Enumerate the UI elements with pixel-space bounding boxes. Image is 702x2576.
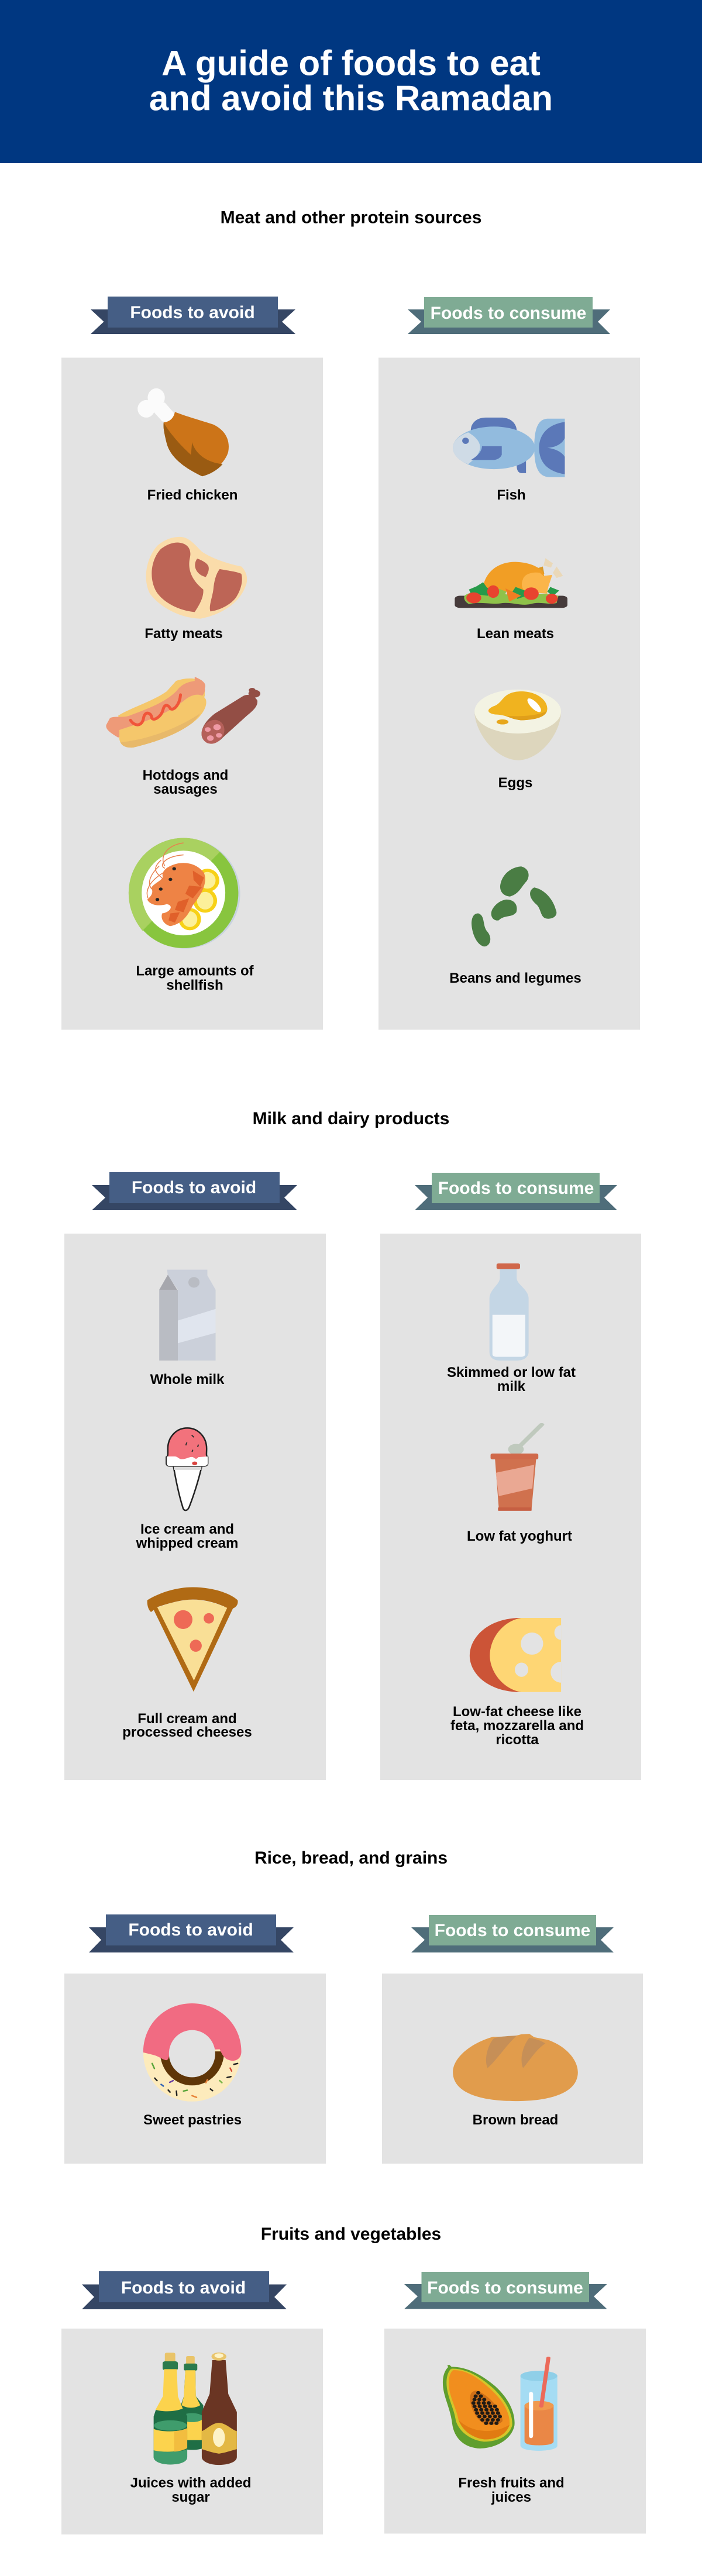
icon: plate of shellfish — [129, 838, 240, 949]
icon: fatty meat — [146, 537, 247, 619]
icon: milk bottle — [490, 1263, 529, 1361]
heading: rice, bread, and grains: Rice, bread, and grains — [254, 1848, 448, 1868]
label: fresh fruits and juices: Fresh fruits and — [458, 2475, 565, 2491]
ribbon: foods to avoid: Foods to avoid — [130, 303, 255, 322]
ribbon: foods to avoid: Foods to avoid — [121, 2278, 246, 2298]
section: rice, bread, and grains — [64, 1848, 643, 2164]
icon: fish — [453, 418, 565, 477]
label: large amounts of shellfish: Large amounts of — [136, 963, 254, 979]
label: whole milk: Whole milk — [150, 1372, 225, 1387]
label: fried chicken: Fried chicken — [147, 487, 238, 503]
label: hotdogs and sausages: Hotdogs and — [143, 767, 228, 783]
icon: hotdog and sausage — [106, 677, 260, 748]
section: meat and other protein sources — [61, 208, 640, 1029]
ribbon: foods to avoid: Foods to avoid — [128, 1920, 253, 1940]
label line: shellfish: shellfish — [166, 977, 223, 993]
section: milk and dairy products — [64, 1109, 641, 1780]
icon: yoghurt cup with spoon — [491, 1424, 542, 1511]
label line: sausages: sausages — [153, 781, 218, 797]
section: fruits and vegetables — [61, 2224, 646, 2534]
icon: sugary juice bottles — [154, 2353, 237, 2465]
label: full cream and processed cheeses: Full cream and — [137, 1711, 237, 1727]
panel: dairy foods to avoid — [64, 1234, 326, 1780]
header banner with title: and avoid this Ramadan — [149, 78, 553, 118]
label: sweet pastries: Sweet pastries — [143, 2112, 242, 2128]
icon: beans and legumes — [472, 866, 556, 946]
panel: grain foods to avoid — [64, 1974, 326, 2164]
panel: dairy foods to consume — [380, 1234, 641, 1780]
label line: whipped cream: whipped cream — [136, 1535, 238, 1551]
label line: ricotta: ricotta — [495, 1732, 539, 1748]
panel: protein foods to consume — [378, 358, 640, 1029]
ribbon: foods to avoid — [92, 1172, 297, 1210]
panel: protein foods to avoid — [61, 358, 323, 1029]
heading: milk and dairy products: Milk and dairy products — [253, 1109, 449, 1128]
ribbon: foods to avoid — [82, 2271, 287, 2309]
icon: ice cream cone — [166, 1428, 208, 1510]
ribbon: foods to consume: Foods to consume — [438, 1179, 594, 1198]
header banner with title: A guide of foods to eat — [161, 43, 541, 83]
ribbon: foods to avoid — [89, 1914, 294, 1952]
label: eggs: Eggs — [498, 775, 532, 791]
ribbon: foods to consume — [415, 1173, 617, 1210]
icon: brown bread — [453, 2034, 578, 2101]
label line: sugar: sugar — [171, 2489, 210, 2505]
label line: milk: milk — [497, 1379, 526, 1394]
ribbon: foods to consume — [411, 1915, 614, 1952]
label line: processed cheeses: processed cheeses — [122, 1724, 252, 1740]
label: low fat yoghurt: Low fat yoghurt — [467, 1528, 572, 1544]
label: fatty meats: Fatty meats — [144, 626, 223, 642]
icon: cheese wheel — [470, 1618, 561, 1692]
label: lean meats: Lean meats — [477, 626, 554, 642]
ribbon: foods to consume: Foods to consume — [435, 1921, 590, 1940]
icon: milk carton — [159, 1270, 216, 1361]
label: brown bread: Brown bread — [473, 2112, 558, 2128]
ribbon: foods to avoid — [91, 297, 295, 334]
ribbon: foods to consume: Foods to consume — [431, 304, 586, 323]
label: juices with added sugar: Juices with added — [130, 2475, 251, 2491]
icon: egg — [474, 690, 561, 760]
icon: papaya and fruit juice — [443, 2358, 558, 2451]
heading: meat and other protein sources: Meat and other protein sources — [221, 208, 481, 227]
label: skimmed or low fat milk: Skimmed or low fat — [447, 1365, 576, 1380]
label: ice cream and whipped cream: Ice cream and — [140, 1521, 234, 1537]
label: low-fat cheese like feta, mozzarella and ricotta: Low-fat cheese like — [453, 1704, 581, 1720]
ribbon: foods to consume: Foods to consume — [427, 2278, 583, 2298]
panel: fruit and vegetable foods to consume — [384, 2329, 646, 2534]
label: beans and legumes: Beans and legumes — [449, 970, 581, 986]
ribbon: foods to consume — [404, 2272, 607, 2309]
icon: roast turkey with salad — [455, 558, 567, 608]
label line: feta, mozzarella and: feta, mozzarella and — [450, 1718, 584, 1734]
icon: fried chicken — [137, 388, 229, 476]
header banner with title — [0, 0, 702, 163]
label line: juices: juices — [491, 2489, 531, 2505]
panel: grain foods to consume — [382, 1974, 643, 2164]
label: fish: Fish — [497, 487, 526, 503]
icon: pizza slice — [147, 1587, 238, 1692]
panel: fruit and vegetable foods to avoid — [61, 2329, 323, 2534]
ribbon: foods to avoid: Foods to avoid — [132, 1178, 256, 1197]
heading: fruits and vegetables: Fruits and vegetables — [261, 2224, 441, 2244]
ribbon: foods to consume — [408, 297, 610, 334]
icon: iced doughnut — [143, 2003, 242, 2102]
